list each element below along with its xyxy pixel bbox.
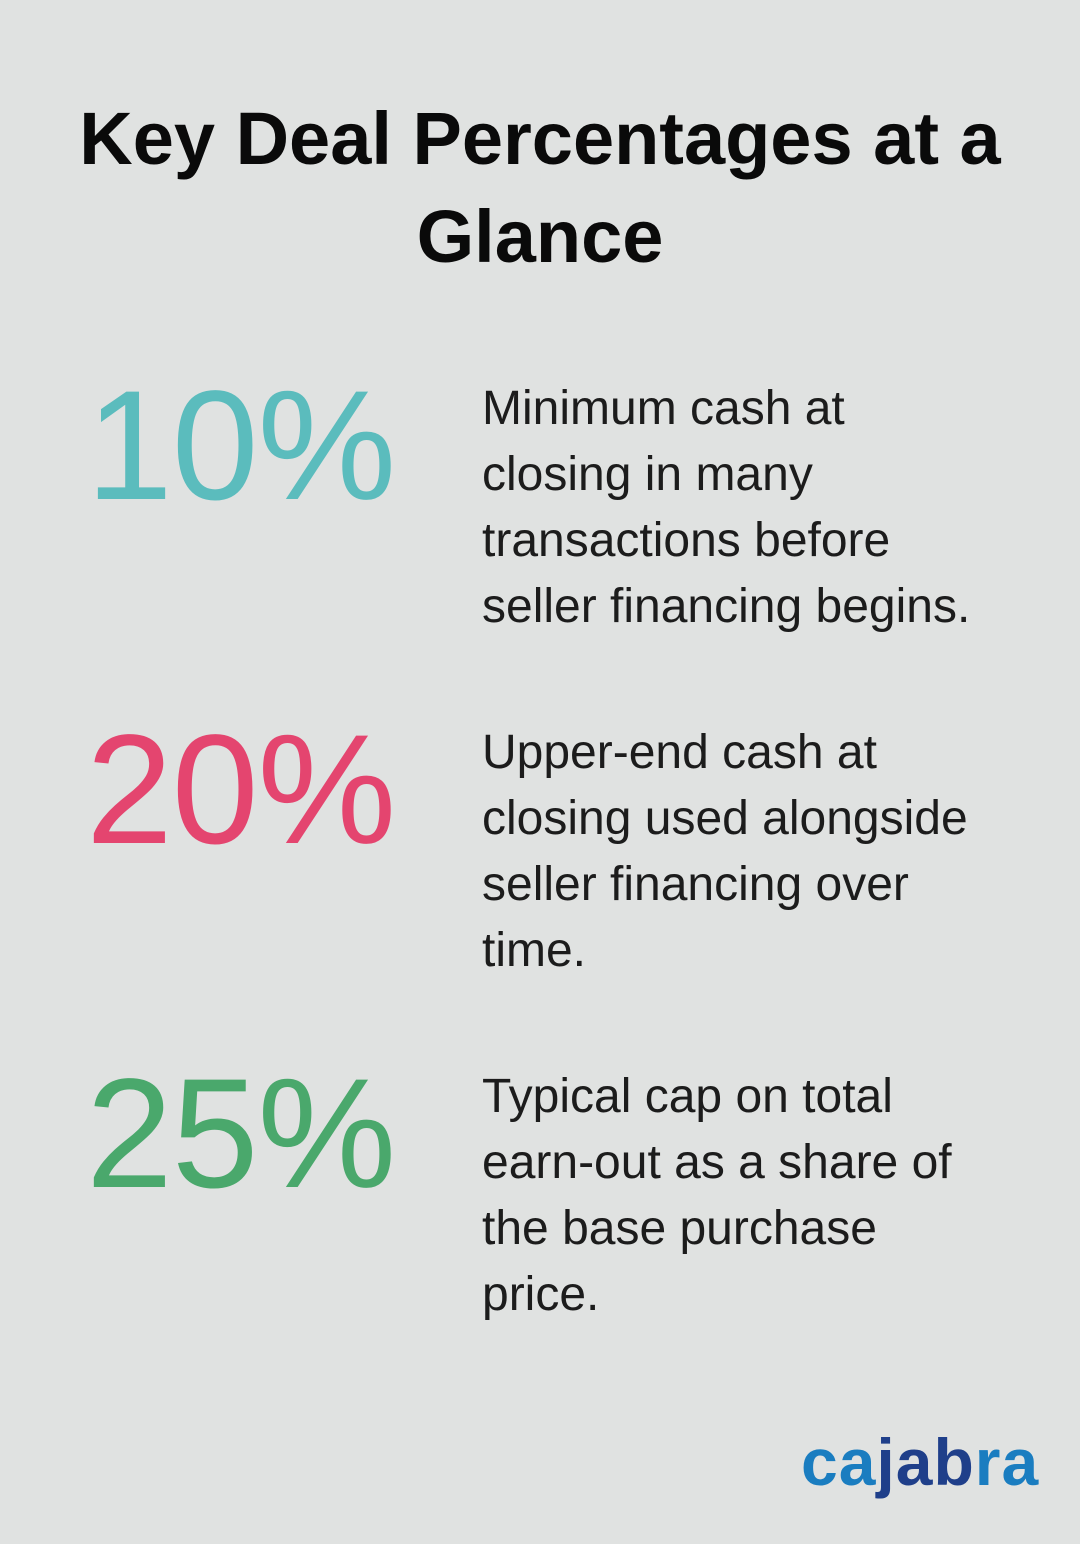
text: 10% description: seller financing begins. [482, 580, 970, 633]
stat: 25%: 25% [86, 1047, 395, 1221]
stat: 10%: 10% [86, 359, 395, 533]
title [79, 97, 1002, 278]
text: 10% description [482, 382, 970, 633]
text: 25% description: Typical cap on total [482, 1070, 893, 1123]
text: 25% description: the base purchase [482, 1202, 877, 1255]
title: Glance [417, 195, 663, 278]
text: 25% description: price. [482, 1268, 599, 1321]
text: 25% description [482, 1070, 952, 1321]
logo: cajabra [801, 1425, 1039, 1499]
text: 10% description: Minimum cash at [482, 382, 845, 435]
text: 10% description: closing in many [482, 448, 813, 501]
title: Key Deal Percentages at a [79, 97, 1001, 180]
text: 20% description: time. [482, 924, 586, 977]
stat: 20%: 20% [86, 703, 395, 877]
text: 10% description: transactions before [482, 514, 890, 567]
text: 25% description: earn-out as a share of [482, 1136, 952, 1189]
text: 20% description [482, 726, 968, 977]
text: 20% description: closing used alongside [482, 792, 968, 845]
text: 20% description: Upper-end cash at [482, 726, 877, 779]
text: 20% description: seller financing over [482, 858, 909, 911]
